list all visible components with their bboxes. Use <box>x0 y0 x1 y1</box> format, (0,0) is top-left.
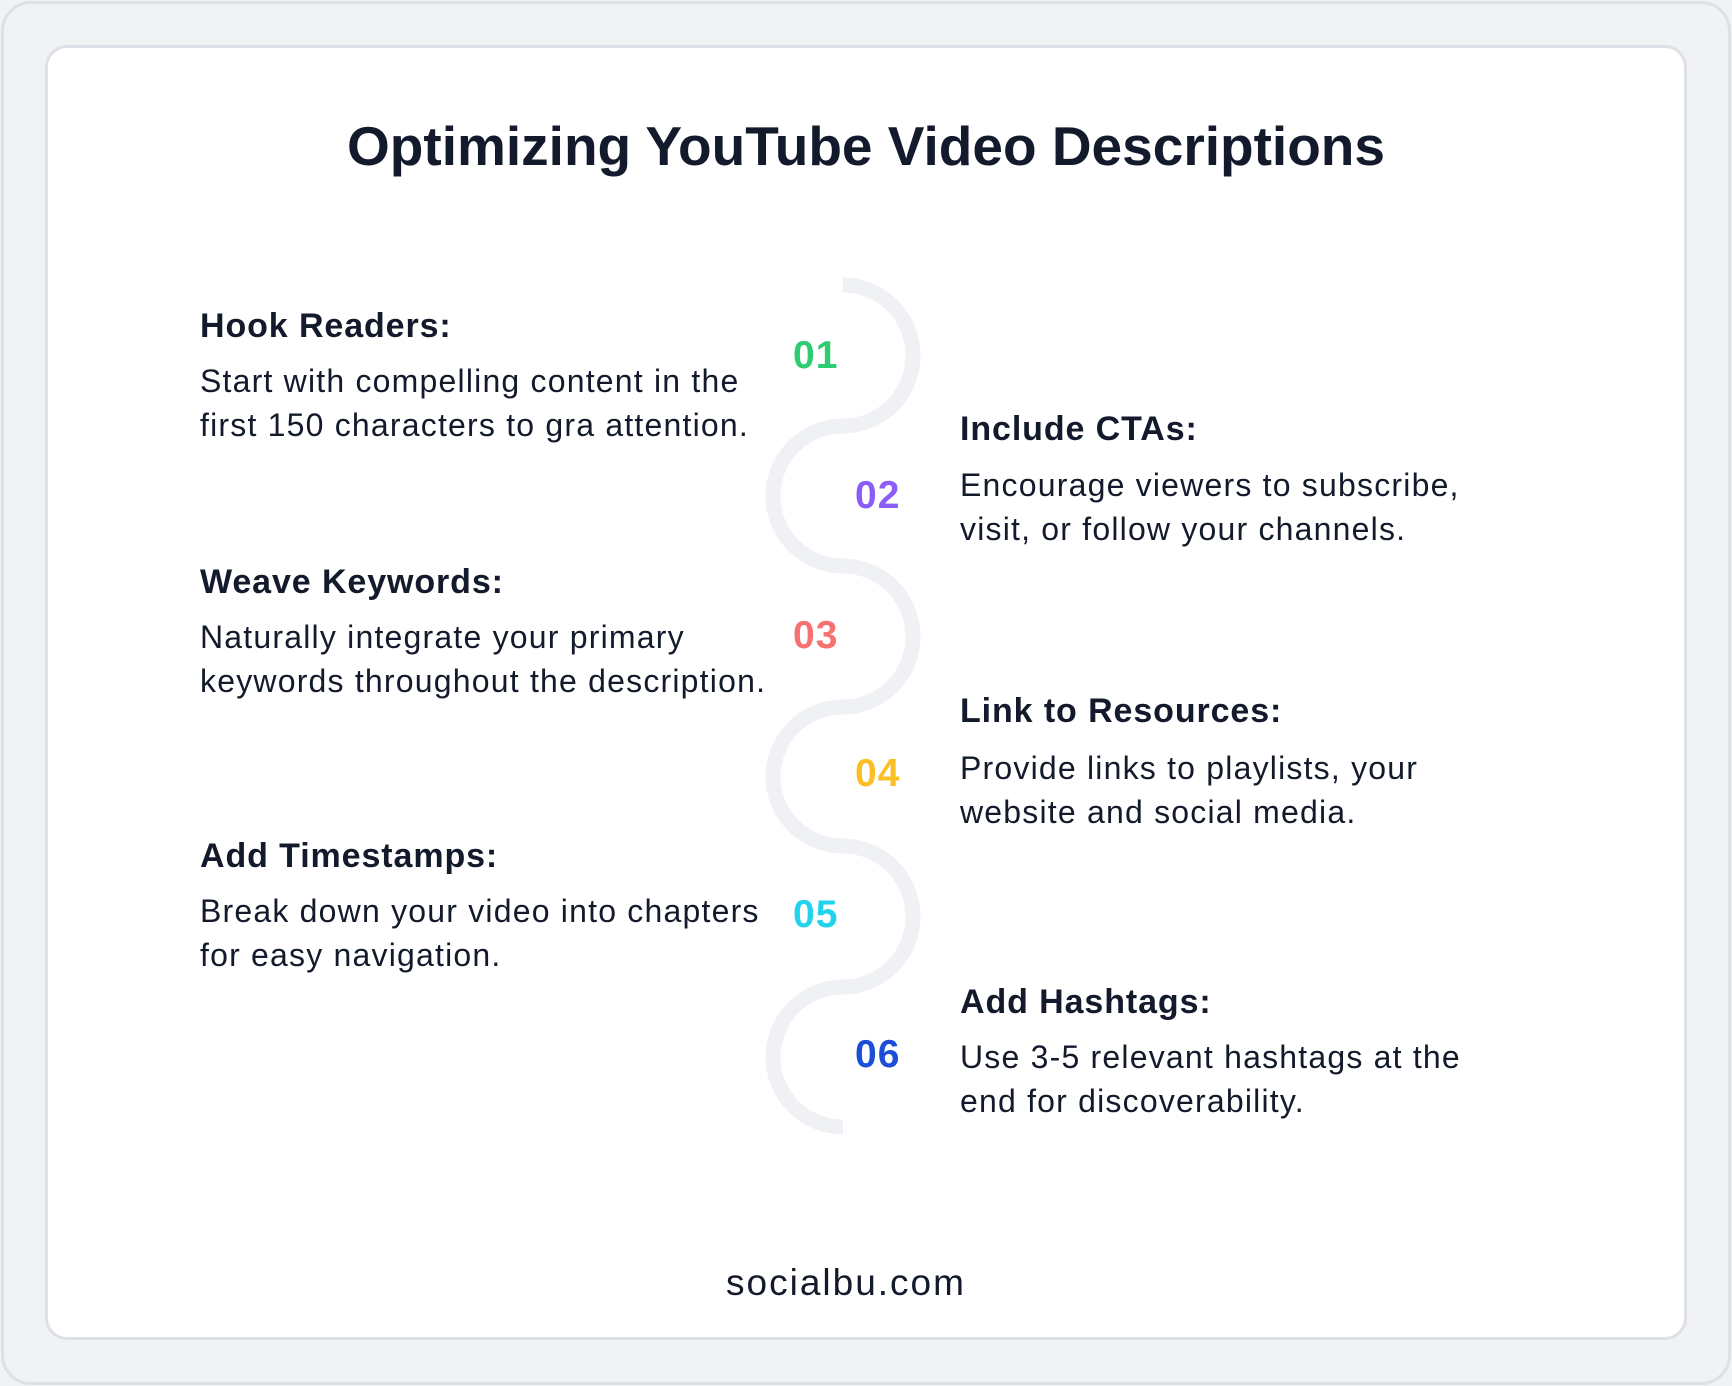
item 1: first 150 characters to gra attention. <box>200 407 749 443</box>
item 3: keywords throughout the description. <box>200 663 766 699</box>
number 05: 05 <box>793 893 838 936</box>
item 6: end for discoverability. <box>960 1083 1305 1119</box>
item 3 <box>200 563 766 699</box>
item 4: Link to Resources: <box>960 692 1282 730</box>
item 1 <box>200 307 749 443</box>
item 4: Provide links to playlists, your <box>960 750 1418 786</box>
item 4: website and social media. <box>960 794 1356 830</box>
item 5: Break down your video into chapters <box>200 893 760 929</box>
item 1: Hook Readers: <box>200 307 452 345</box>
item 4 <box>960 692 1418 830</box>
item 5 <box>200 837 760 973</box>
number 02: 02 <box>855 474 900 517</box>
item 3: Weave Keywords: <box>200 563 504 601</box>
item 1: Start with compelling content in the <box>200 363 739 399</box>
item 5: Add Timestamps: <box>200 837 498 875</box>
number 03: 03 <box>793 614 838 657</box>
item 2: visit, or follow your channels. <box>960 511 1406 547</box>
item 6: Add Hashtags: <box>960 983 1212 1021</box>
item 5: for easy navigation. <box>200 937 502 973</box>
title: Optimizing YouTube Video Descriptions <box>347 115 1385 177</box>
number 04: 04 <box>855 752 900 795</box>
item 6 <box>960 983 1461 1119</box>
number 01: 01 <box>793 334 838 377</box>
item 3: Naturally integrate your primary <box>200 619 685 655</box>
item 6: Use 3-5 relevant hashtags at the <box>960 1039 1461 1075</box>
item 2: Encourage viewers to subscribe, <box>960 467 1460 503</box>
item 2: Include CTAs: <box>960 410 1198 448</box>
number 06: 06 <box>855 1033 900 1076</box>
footer: socialbu.com <box>726 1262 966 1303</box>
item 2 <box>960 410 1460 547</box>
